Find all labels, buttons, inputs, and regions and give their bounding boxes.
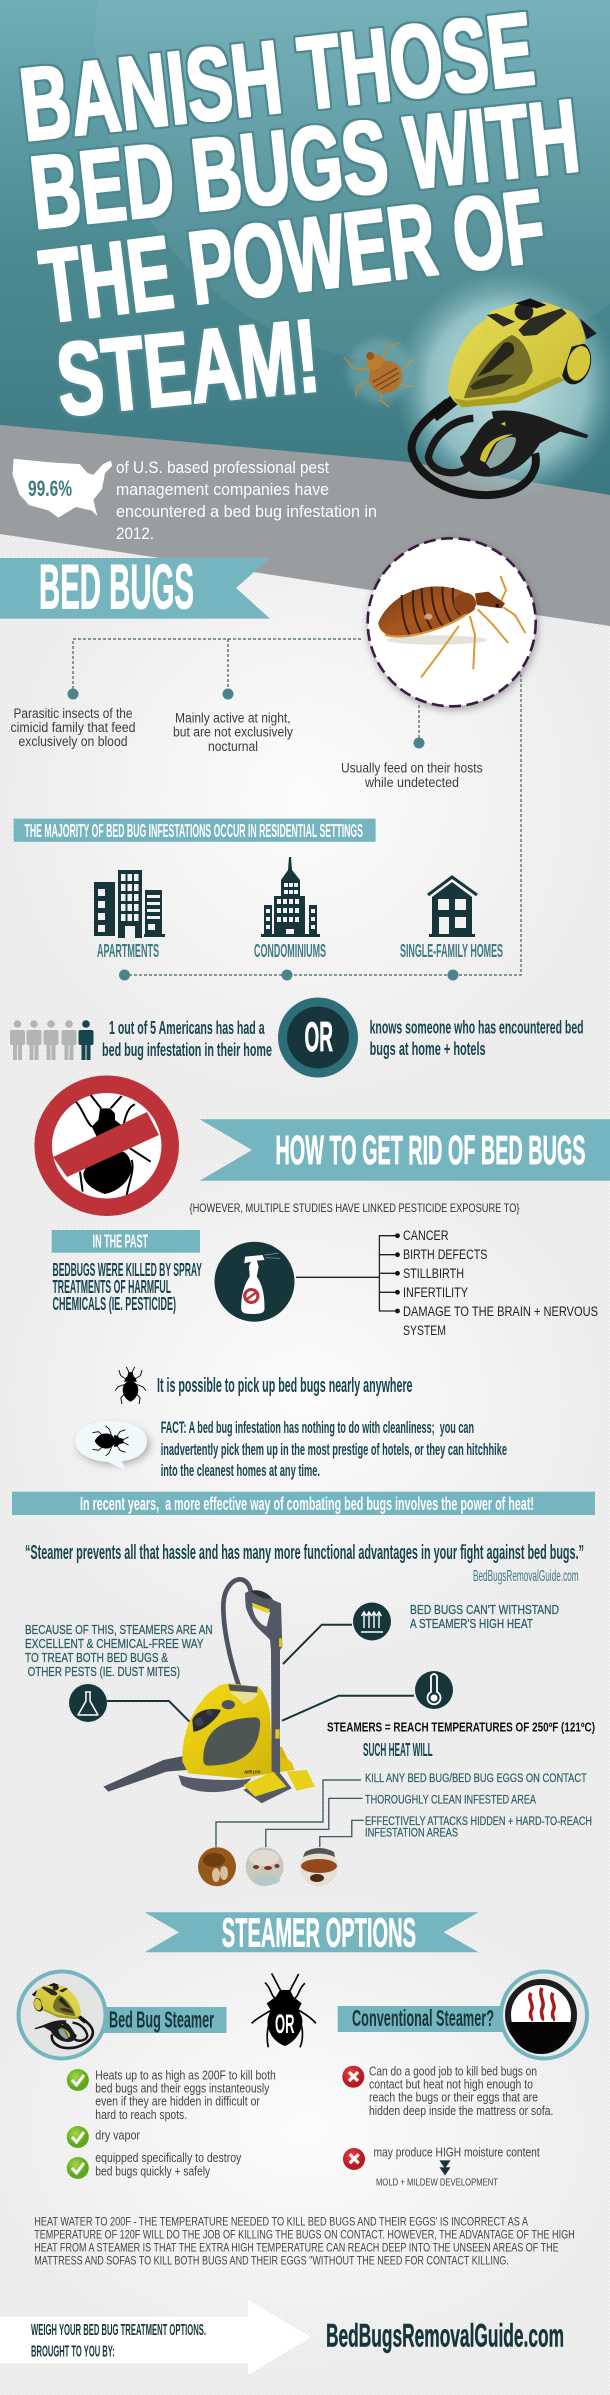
fact: parasitic insects: cimicid family that feed: [10, 720, 136, 735]
footer arrow: WEIGH YOUR BED BUG TREATMENT OPTIONS.: [31, 2322, 206, 2339]
photo: hidden areas: [300, 1847, 338, 1886]
list: bed bug steamer pros: dry vapor: [95, 2128, 141, 2143]
banner: how to get rid of bed bugs: [200, 1119, 610, 1181]
list: conventional steamer cons: Can do a good job to kill bed bugs on: [369, 2063, 537, 2078]
icon: check: [67, 2069, 89, 2091]
list: conventional steamer cons: [342, 2063, 553, 2189]
banner: steamer options: [145, 1910, 479, 1956]
icon: check: [67, 2126, 89, 2148]
fact: feed undetected: while undetected: [364, 775, 459, 790]
past treatments text: TREATMENTS OF HARMFUL: [52, 1277, 171, 1297]
text: BEDBUGS WERE KILLED BY SPRAY: [52, 1260, 202, 1280]
icon: thermometer: [415, 1671, 453, 1709]
label: in the past: [52, 1230, 200, 1253]
list: conventional steamer cons: MOLD + MILDEW DEVELOPMENT: [376, 2177, 498, 2189]
stat: one out of five: [102, 1018, 272, 1060]
fact text: [161, 1419, 507, 1480]
icon: single-family home: [428, 877, 477, 937]
fact: active at night: nocturnal: [208, 739, 258, 754]
photo: infested area: [246, 1847, 284, 1886]
stat: one out of five: bed bug infestation in their home: [102, 1040, 272, 1060]
stat: knows someone: [370, 1018, 584, 1059]
quote: [25, 1542, 584, 1585]
title: STEAM!: [52, 298, 324, 439]
past treatments text: [52, 1260, 202, 1314]
photo: bed bug eggs: [198, 1847, 236, 1886]
icon: double arrow: [440, 2161, 450, 2175]
list: bed bug steamer pros: bed bugs quickly + safely: [95, 2163, 210, 2178]
icon: one in five people: [10, 1020, 94, 1060]
list: health effects: BIRTH DEFECTS: [403, 1247, 487, 1262]
connector lines to photos: [216, 1780, 364, 1847]
banner: steamer options: STEAMER OPTIONS: [222, 1910, 416, 1956]
stat text: [116, 459, 377, 543]
icon: no bugs sign: [35, 1076, 179, 1216]
icon: USA map: [12, 459, 112, 518]
icon: hot surface: [501, 1972, 587, 2058]
list: conventional steamer cons: may produce HIGH moisture content: [374, 2145, 540, 2160]
icon: speech bubble bug: [75, 1421, 150, 1470]
option: conventional steamer: Conventional Steamer?: [352, 2005, 494, 2031]
dotted connectors: [73, 639, 521, 975]
list: bed bug steamer pros: bed bugs and their eggs instanteously: [95, 2081, 270, 2096]
callout: temperatures: SUCH HEAT WILL: [363, 1740, 433, 1760]
photo: bed bug in circle: [368, 538, 538, 710]
icon: cross: [343, 2148, 365, 2170]
list: what heat does: [365, 1773, 592, 1840]
header background: [0, 0, 610, 500]
fact: active at night: but are not exclusively: [173, 725, 293, 740]
fact: parasitic insects: Parasitic insects of the: [14, 706, 132, 721]
label: in the past: IN THE PAST: [93, 1232, 148, 1252]
fact: feed undetected: [341, 760, 483, 790]
stat: knows someone: bugs at home + hotels: [370, 1039, 486, 1059]
fact: active at night: Mainly active at night,: [175, 710, 291, 726]
list: health effects: INFERTILITY: [403, 1285, 468, 1300]
icon: flask: [69, 1684, 107, 1722]
banner: bed bugs: BED BUGS: [39, 552, 194, 622]
icon: condominiums: [261, 857, 320, 937]
list: bed bug steamer pros: equipped specifically to destroy: [95, 2150, 242, 2165]
stat: one out of five: 1 out of 5 Americans has had a: [109, 1018, 265, 1038]
icon: heat waves: [353, 1602, 391, 1640]
list: conventional steamer cons: contact but heat not high enough to: [369, 2076, 533, 2091]
list: bed bug steamer pros: Heats up to as high as 200F to kill both: [95, 2067, 276, 2082]
icon: apartments: [94, 870, 165, 938]
list: health effects: [403, 1228, 598, 1338]
callout: chemical-free: BECAUSE OF THIS, STEAMERS ARE AN: [25, 1623, 212, 1637]
list: conventional steamer cons: hidden deep inside the mattress or sofa.: [369, 2103, 553, 2118]
text: SINGLE-FAMILY HOMES: [400, 941, 503, 961]
fact: parasitic insects: exclusively on blood: [18, 734, 128, 749]
callout: chemical-free: [25, 1623, 212, 1722]
icon: OR bug: [252, 1973, 316, 2047]
callout: chemical-free: EXCELLENT & CHEMICAL-FREE WAY: [25, 1637, 204, 1651]
icon: check: [67, 2157, 89, 2179]
icon: cross: [342, 2066, 364, 2088]
option: bed bug steamer: Bed Bug Steamer: [109, 2007, 214, 2033]
paragraph: heat explanation: [34, 2216, 575, 2268]
past treatments text: CHEMICALS (IE. PESTICIDE): [52, 1294, 176, 1314]
OR badge: [278, 998, 358, 1078]
icon: mini steamer: [18, 1972, 106, 2058]
map stat: [12, 459, 377, 543]
callout: chemical-free: OTHER PESTS (IE. DUST MITES): [28, 1665, 180, 1679]
banner: bed bugs: [0, 552, 270, 622]
label: apartments: APARTMENTS: [97, 941, 159, 961]
text: CONDOMINIUMS: [254, 941, 326, 961]
footer arrow: BROUGHT TO YOU BY:: [31, 2344, 115, 2361]
icon: small bug: [115, 1367, 146, 1404]
fact: feed undetected: Usually feed on their hosts: [341, 760, 483, 776]
fact text: into the cleanest homes at any time.: [161, 1462, 320, 1480]
icon: USA map: 99.6%: [28, 476, 72, 501]
icon: spray bottle: [214, 1242, 294, 1322]
callout: chemical-free: TO TREAT BOTH BED BUGS &: [25, 1651, 169, 1665]
callout: high heat: A STEAMER'S HIGH HEAT: [410, 1617, 533, 1631]
title: [15, 0, 584, 439]
OR badge: OR: [304, 1013, 333, 1060]
icon: OR bug: OR: [275, 2009, 294, 2039]
list: health effects: SYSTEM: [403, 1323, 446, 1338]
fact: parasitic insects: [10, 706, 136, 749]
steamer photo: upright: MR100: [244, 1769, 261, 1775]
list: bed bug steamer pros: [67, 2067, 276, 2179]
list: what heat does: THOROUGHLY CLEAN INFESTED AREA: [365, 1795, 536, 1807]
icon: floating bed bug: [335, 326, 427, 419]
subhead: residential settings: [14, 819, 376, 842]
list: bed bug steamer pros: even if they are hidden in difficult or: [95, 2094, 260, 2109]
fact: active at night: [173, 710, 293, 754]
steamer product photo: [395, 271, 610, 501]
list: what heat does: INFESTATION AREAS: [365, 1828, 458, 1840]
list: health effects: STILLBIRTH: [403, 1266, 464, 1281]
stat text: management companies have: [116, 481, 329, 499]
list: health effects: CANCER: [403, 1228, 449, 1243]
stat text: of U.S. based professional pest: [116, 459, 329, 477]
option: bed bug steamer: [18, 1972, 226, 2058]
steamer photo: upright: [103, 1579, 315, 1803]
callout: temperatures: [282, 1671, 595, 1760]
stat text: 2012.: [116, 525, 154, 543]
stat text: encountered a bed bug infestation in: [116, 503, 377, 521]
callout: high heat: BED BUGS CAN'T WITHSTAND: [410, 1603, 559, 1617]
connector: health effects tree: [296, 1233, 400, 1313]
footer arrow: [0, 2300, 311, 2375]
option: conventional steamer: [338, 1972, 587, 2058]
callout: high heat: [283, 1602, 559, 1664]
list: conventional steamer cons: reach the bugs or their eggs that are: [369, 2090, 538, 2105]
pesticide note: {HOWEVER, MULTIPLE STUDIES HAVE LINKED PESTICIDE EXPOSURE TO}: [190, 1201, 520, 1215]
list: bed bug steamer pros: hard to reach spots.: [95, 2107, 187, 2122]
grey stat band: [0, 425, 610, 626]
